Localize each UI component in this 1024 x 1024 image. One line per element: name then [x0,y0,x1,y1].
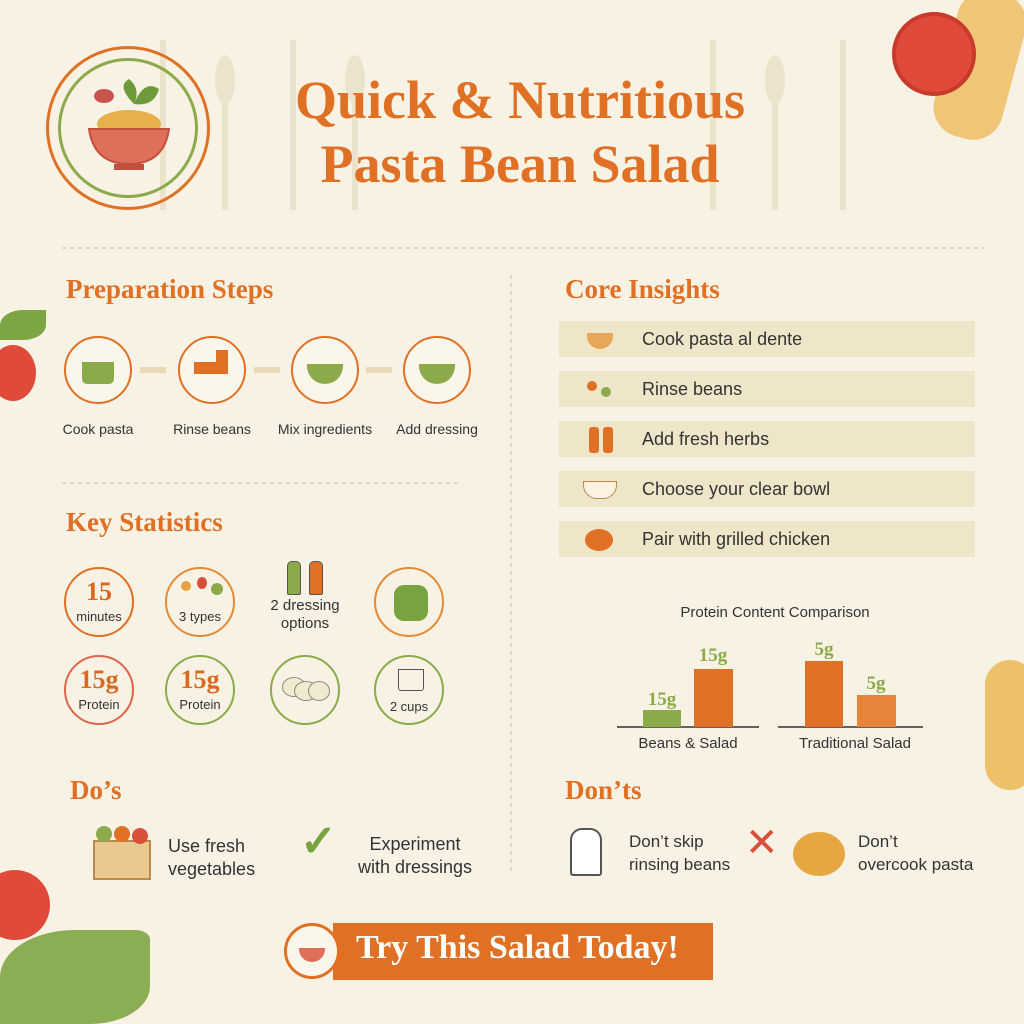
steps: Rinse beans [173,421,251,437]
donts items: Don’t skip [629,832,704,851]
title [295,70,745,194]
call to action banner: Try This Salad Today! [356,929,679,966]
donts items: rinsing beans [629,855,730,874]
call to action banner [284,923,713,980]
stats grid: 15 [86,577,112,606]
stats grid: Protein [78,697,120,712]
insights list: Pair with grilled chicken [642,529,830,549]
stats grid [64,561,444,725]
background cutlery pattern [160,40,846,210]
stats grid: minutes [76,609,122,624]
stats grid: 15g [80,665,118,694]
insights list [559,321,975,557]
decoration: pasta top right [927,0,1024,147]
dos items: Use fresh [168,836,245,856]
chart: protein comparison: 5g [814,639,834,660]
stats grid: 3 types [179,609,221,624]
donts items: ✕ [745,821,779,865]
steps: Mix ingredients [278,421,372,437]
step: dressing [403,336,471,404]
step: cook pasta [64,336,132,404]
chart: protein comparison: Traditional Salad [799,735,911,752]
decoration: tomato top right [892,12,976,96]
stats grid: Protein [179,697,221,712]
stats grid: 2 dressing [270,597,340,614]
donts items: Don’t [858,832,898,851]
donts items: overcook pasta [858,855,973,874]
title: Pasta Bean Salad [320,134,720,194]
step: mix [291,336,359,404]
insights list: Rinse beans [642,379,742,399]
logo [46,46,210,210]
insights list: Add fresh herbs [642,429,769,449]
chart: protein comparison: 15g [699,645,728,666]
chart: protein comparison: 15g [648,689,677,710]
steps: Add dressing [396,421,478,437]
chart: protein comparison: Beans & Salad [638,735,738,752]
step: rinse beans [178,336,246,404]
heading: dos: Do’s [70,775,122,805]
dos items: with dressings [358,857,472,877]
steps [63,336,478,437]
decoration: left basil and tomato [0,345,36,401]
arrows [140,367,166,373]
heading: core insights: Core Insights [565,274,720,304]
dos items: Experiment [370,834,461,854]
chart: protein comparison: Protein Content Comparison [680,604,870,621]
dos items [93,817,472,880]
dos items: ✓ [300,817,337,866]
dos items: vegetables [168,859,255,879]
title: Quick & Nutritious [295,70,745,130]
heading: preparation steps: Preparation Steps [66,274,273,304]
chart: protein comparison [617,604,923,752]
stats grid: 2 cups [390,699,428,714]
heading: key statistics: Key Statistics [66,507,223,537]
insights list: Choose your clear bowl [642,479,830,499]
stats grid: options [281,615,329,632]
donts items [570,821,974,876]
steps: Cook pasta [63,421,133,437]
heading: donts: Don’ts [565,775,642,805]
insights list: Cook pasta al dente [642,329,802,349]
chart: protein comparison: 5g [866,673,886,694]
stats grid: 15g [180,665,220,694]
